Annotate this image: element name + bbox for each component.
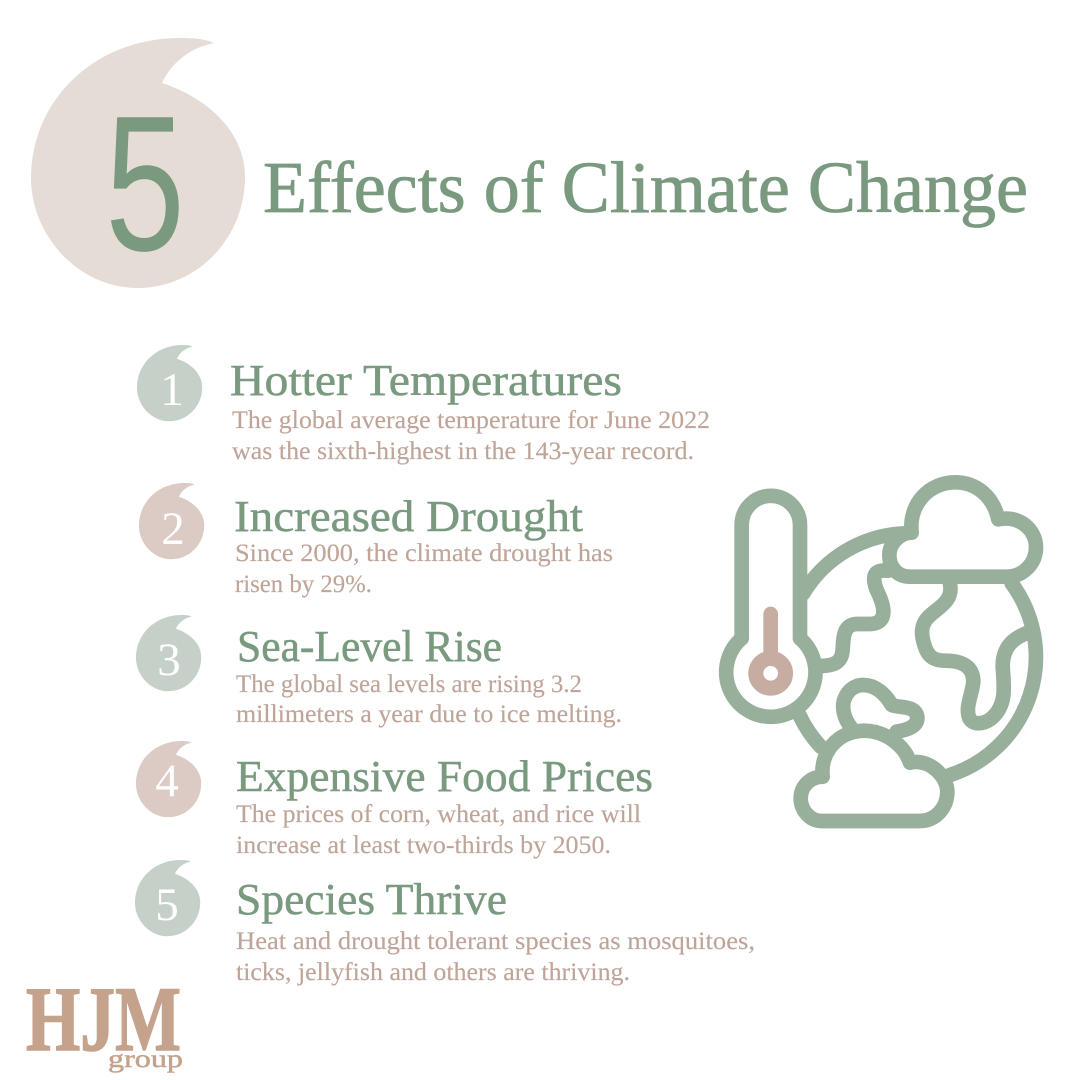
number badge 4 [136, 741, 201, 817]
number badge 2 [139, 483, 204, 559]
description 2: risen by 29%. [235, 571, 372, 598]
header badge: large speech bubble with number 5: 5 [105, 75, 185, 291]
description 2 [235, 540, 613, 598]
description 4: increase at least two-thirds by 2050. [236, 832, 611, 859]
heading 4: Expensive Food Prices [236, 752, 653, 801]
title: Effects of Climate Change [263, 147, 1028, 228]
description 3 [236, 671, 622, 728]
number badge 2: 2 [161, 503, 185, 555]
item 4: expensive food prices [136, 741, 653, 859]
thermometer tube [726, 496, 815, 717]
description 1: was the sixth-highest in the 143-year record. [232, 438, 694, 465]
logo: HJM group: group [108, 1046, 183, 1073]
heading 2: Increased Drought [234, 492, 583, 541]
item 1: hotter temperatures [137, 345, 710, 465]
top cloud [889, 482, 1036, 577]
globe outline arcs [799, 533, 1036, 775]
number badge 4: 4 [155, 755, 179, 807]
description 2: Since 2000, the climate drought has [235, 540, 613, 567]
number badge 1 [137, 345, 202, 421]
heading 1: Hotter Temperatures [230, 356, 622, 405]
number badge 5 [135, 860, 200, 936]
logo: HJM group: HJM [26, 968, 181, 1070]
number badge 5: 5 [155, 879, 179, 931]
item 2: increased drought [139, 483, 613, 598]
number badge 3 [136, 615, 201, 691]
description 1: The global average temperature for June 2022 [232, 407, 710, 434]
description 5: ticks, jellyfish and others are thriving. [236, 959, 630, 986]
continents [818, 571, 1031, 732]
icon: globe with thermometer and clouds [726, 482, 1036, 821]
number badge 1: 1 [160, 364, 184, 416]
heading 5: Species Thrive [236, 875, 507, 924]
description 4: The prices of corn, wheat, and rice will [236, 801, 641, 828]
number badge 3: 3 [157, 634, 181, 686]
heading 3: Sea-Level Rise [237, 622, 502, 671]
description 3: millimeters a year due to ice melting. [236, 701, 622, 728]
description 3: The global sea levels are rising 3.2 [236, 671, 582, 698]
item 5: species thrive [135, 860, 755, 986]
thermometer mercury [756, 614, 785, 688]
description 5 [236, 928, 755, 986]
description 5: Heat and drought tolerant species as mosquitoes, [236, 928, 755, 955]
item 3: sea-level rise [136, 615, 622, 728]
description 4 [236, 801, 641, 859]
bottom cloud [801, 731, 947, 821]
header badge: large speech bubble with number 5 [31, 38, 245, 291]
description 1 [232, 407, 710, 465]
